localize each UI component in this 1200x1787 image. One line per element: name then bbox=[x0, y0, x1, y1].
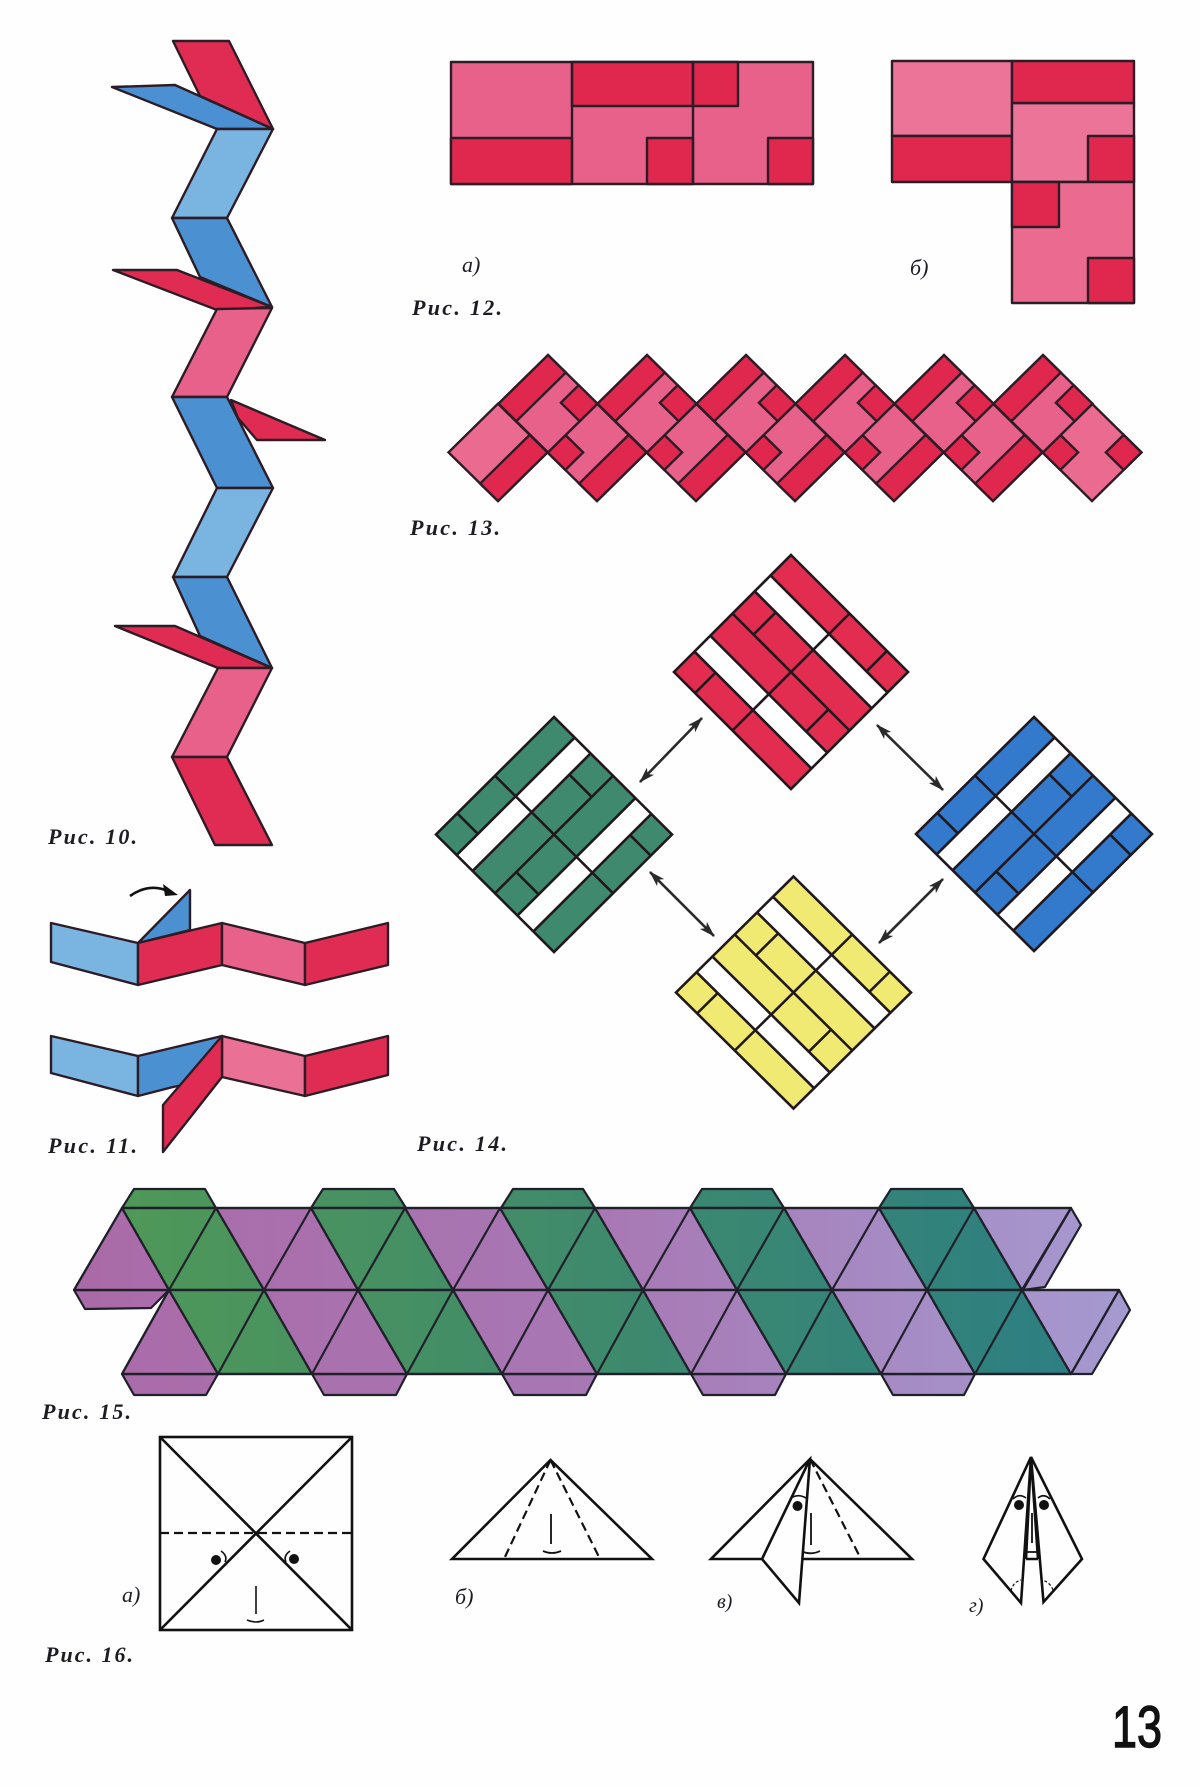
tile: lower 4 bbox=[746, 404, 844, 501]
figure 14: four coloured diamonds with arrows bbox=[436, 555, 1152, 1108]
figure 15: triangulated net bbox=[74, 1189, 1130, 1395]
label: g: г) bbox=[969, 1595, 984, 1617]
panel: pink bbox=[222, 923, 305, 985]
diamond: yellow bbox=[676, 876, 911, 1108]
block: middle small bbox=[1088, 136, 1134, 182]
figure 12a: horizontal strip pattern bbox=[451, 62, 813, 184]
arrow: red to blue bbox=[877, 725, 943, 790]
flap: red down bbox=[163, 1036, 222, 1152]
tile: upper 2 bbox=[598, 355, 696, 452]
panel: middle pale bbox=[1012, 103, 1134, 182]
label: a: а) bbox=[122, 1582, 140, 1607]
tile: lower 2 bbox=[548, 404, 646, 501]
panel: light blue 1 bbox=[172, 129, 273, 218]
diamond: green bbox=[436, 717, 672, 952]
panel: light blue bbox=[51, 923, 138, 985]
flap: red left 3 bbox=[115, 626, 272, 668]
block: lower bottom-right small bbox=[1088, 258, 1134, 303]
caption: Рис. 13: Рис. 13. bbox=[409, 515, 500, 540]
block: top dark bbox=[1012, 61, 1134, 103]
tile: upper 4 bbox=[796, 355, 894, 452]
tabs: green top flaps bbox=[122, 1189, 974, 1208]
tile: upper 1 bbox=[498, 355, 598, 452]
lines: dashed diagonal folds bbox=[122, 1208, 1071, 1374]
label: v: в) bbox=[717, 1591, 733, 1613]
tile: lower 1 bbox=[448, 404, 548, 501]
tile: lower 5 bbox=[844, 404, 944, 501]
figure 16c: triangle with one fold bbox=[711, 1459, 912, 1603]
tile: lower 6 bbox=[944, 404, 1042, 501]
panel: blue 6 bbox=[173, 577, 272, 668]
arrow: curved fold direction bbox=[130, 884, 178, 896]
block: upper right dark bbox=[693, 62, 738, 106]
panel: light blue 5 bbox=[173, 488, 273, 577]
panel: blue bbox=[138, 1036, 222, 1096]
panel: blue 4 bbox=[172, 397, 273, 488]
tabs: purple bottom flaps and side tabs bbox=[74, 1208, 1130, 1395]
band: green and purple top-row parallelograms bbox=[122, 1208, 1071, 1290]
figure 16d: kite shape with face bbox=[984, 1457, 1082, 1603]
label: b: б) bbox=[910, 255, 928, 280]
caption: Рис. 12: Рис. 12. bbox=[411, 295, 502, 320]
caption: Рис. 11: Рис. 11. bbox=[47, 1133, 137, 1158]
figure 11 upper: strip with flap being folded bbox=[51, 890, 388, 985]
tile: upper 5 bbox=[894, 355, 994, 452]
arrow: yellow to blue bbox=[879, 879, 943, 943]
panel: red bbox=[138, 923, 222, 985]
label: b: б) bbox=[455, 1584, 473, 1609]
block: lower upper-left small bbox=[1012, 182, 1059, 227]
dividers bbox=[572, 62, 693, 184]
band: green and purple bottom-row parallelograms bbox=[122, 1290, 1119, 1374]
flap: red top bbox=[173, 41, 273, 129]
flap: red left 2 bbox=[113, 270, 272, 310]
figure 16a: folded square with face bbox=[160, 1437, 352, 1630]
figure 11 lower: strip with flap folded down bbox=[51, 1036, 388, 1152]
panel: upper left pale bbox=[892, 61, 1012, 136]
figure 13: diamond chain pattern bbox=[448, 355, 1142, 501]
flap: blue triangle bbox=[138, 890, 190, 943]
panel: red right bbox=[305, 923, 388, 985]
caption: Рис. 16: Рис. 16. bbox=[44, 1642, 133, 1667]
caption: Рис. 15: Рис. 15. bbox=[41, 1399, 131, 1424]
block: lower right small bbox=[768, 138, 813, 184]
tile: upper 6 bbox=[994, 355, 1092, 452]
panel: red 8 bbox=[172, 757, 272, 845]
figure 12b: L-shaped pattern bbox=[892, 61, 1134, 303]
background strip bbox=[451, 62, 813, 184]
figure 10: folded zigzag strip bbox=[112, 41, 325, 845]
block: lower left dark bbox=[451, 138, 572, 184]
panel: blue 2 bbox=[172, 218, 272, 307]
block: upper middle dark bbox=[572, 62, 693, 106]
arrow: green to yellow bbox=[650, 872, 714, 936]
panel: light blue bbox=[51, 1036, 138, 1096]
label: a: а) bbox=[462, 252, 480, 277]
arrow: green to red bbox=[640, 718, 702, 782]
panel: pink 7 bbox=[172, 668, 272, 757]
panel: pink 3 bbox=[172, 308, 272, 397]
figure 16b: triangle with dashed folds bbox=[452, 1460, 652, 1559]
tile: lower 3 bbox=[646, 404, 746, 501]
flap: blue top bbox=[112, 85, 273, 129]
tile: lower 7 bbox=[1042, 404, 1142, 501]
diamond: blue bbox=[916, 717, 1152, 951]
tile: upper 3 bbox=[696, 355, 796, 452]
block: lower middle small bbox=[647, 138, 693, 184]
lines: solid horizontal and diagonal folds bbox=[74, 1208, 1119, 1374]
panel: red right bbox=[305, 1036, 388, 1096]
block: lower left dark bbox=[892, 136, 1012, 182]
page number: 13 bbox=[1112, 1695, 1162, 1760]
flap: red right bbox=[231, 400, 325, 440]
panel: pink bbox=[222, 1036, 305, 1096]
diamond: red bbox=[674, 555, 908, 789]
caption: Рис. 14: Рис. 14. bbox=[416, 1131, 507, 1156]
caption: Рис. 10: Рис. 10. bbox=[47, 824, 137, 849]
panel: lower pale bbox=[1012, 182, 1134, 303]
triangle: purple left end bbox=[74, 1208, 169, 1290]
